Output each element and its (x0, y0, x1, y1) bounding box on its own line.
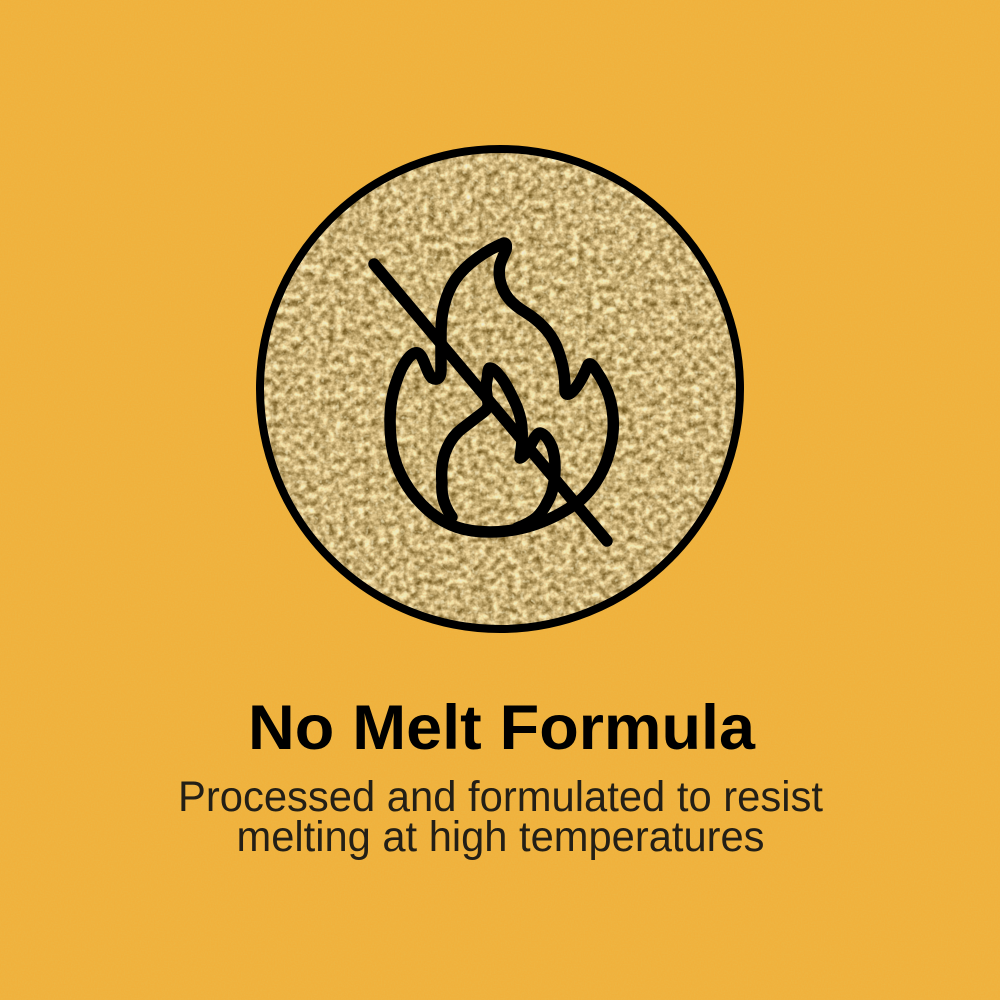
inner flame (442, 368, 555, 528)
icon: crossed-out flame (374, 243, 613, 541)
title: No Melt Formula (248, 693, 756, 763)
panel: grain texture circle (256, 145, 744, 633)
strike-through line (374, 264, 607, 541)
description text (178, 773, 823, 861)
outer flame (390, 243, 613, 532)
description text: melting at high temperatures (236, 813, 764, 861)
description text: Processed and formulated to resist (178, 773, 823, 821)
